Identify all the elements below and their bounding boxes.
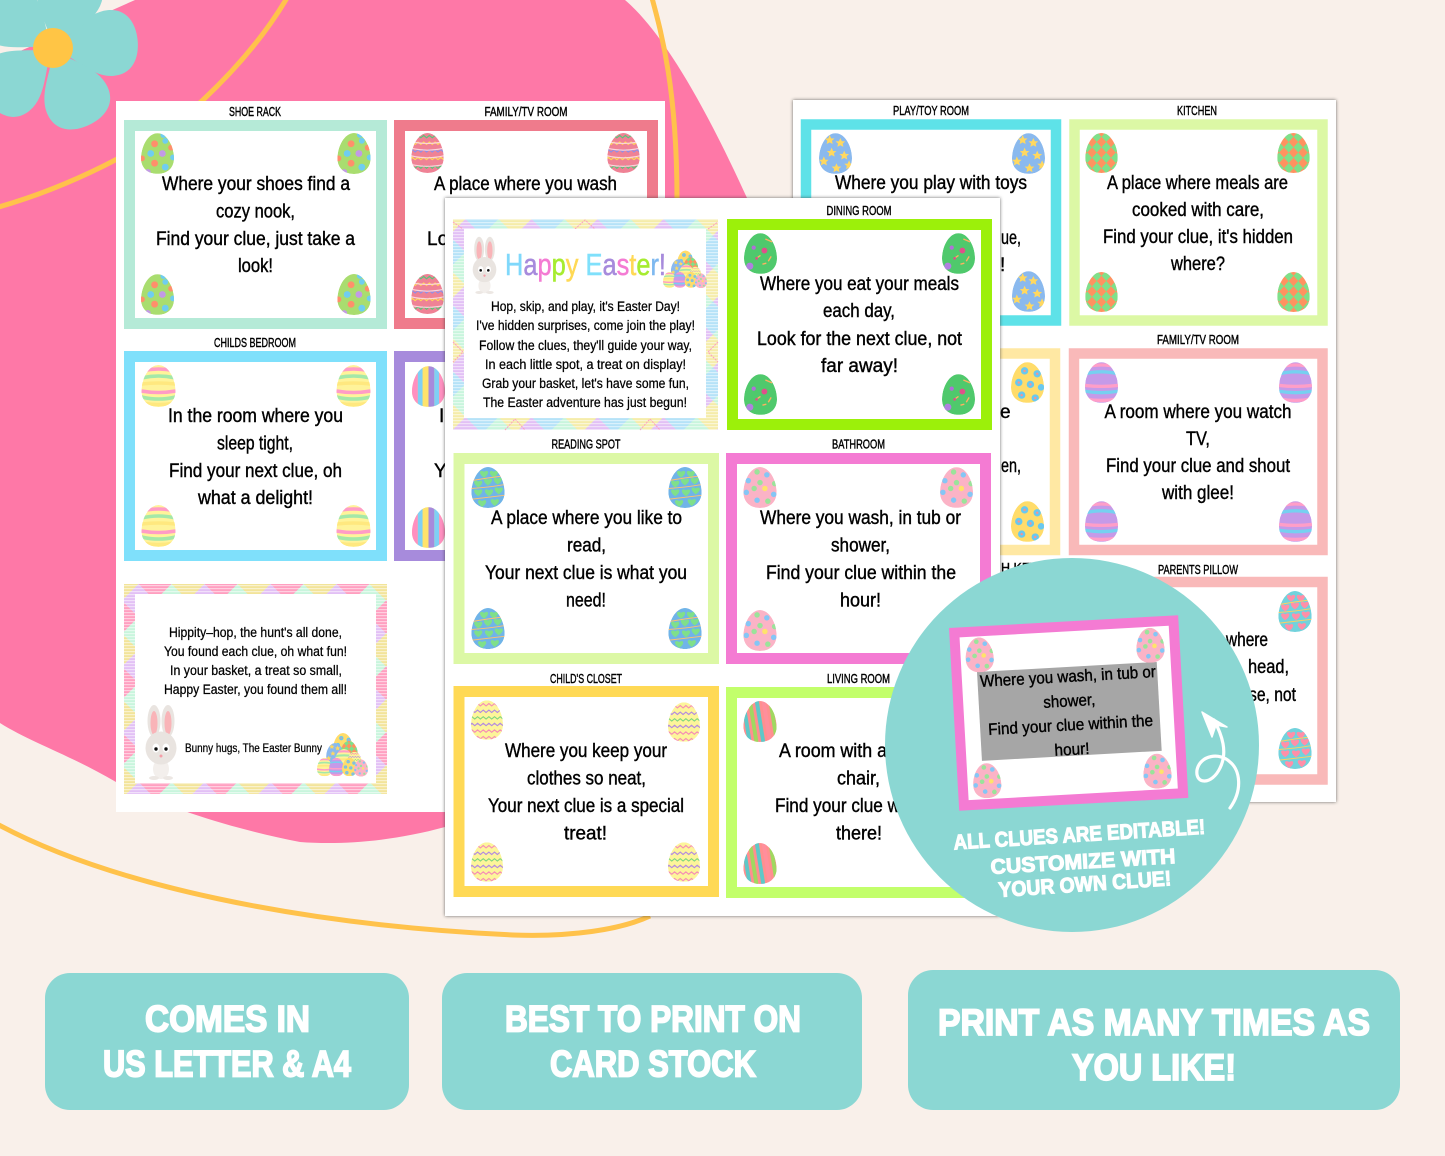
card: reading spot: Your next clue is what you <box>485 563 687 584</box>
card: reading spot: READING SPOT <box>552 438 621 452</box>
text: all clues are editable: ALL CLUES ARE EDITABLE! <box>953 816 1206 854</box>
card: closing poem: Hippity–hop, the hunt's all done, <box>169 625 342 640</box>
card: reading spot: need! <box>566 590 606 612</box>
card: bathroom: BATHROOM <box>832 438 885 452</box>
card: family/TV room 2 <box>1074 333 1322 550</box>
card: living room: A room with a <box>779 741 887 762</box>
text: all clues are editable <box>953 816 1206 902</box>
yellow curve: upper left <box>0 0 287 208</box>
yellow curve: top <box>652 0 677 200</box>
card: child's closet: Where you keep your <box>505 741 668 762</box>
button: best to print on card stock: BEST TO PRINT ON <box>505 998 801 1040</box>
card: Happy Easter intro: Grab your basket, let's have some fun, <box>482 376 689 391</box>
card: living room: there! <box>836 824 882 844</box>
card: family/TV room 2: Find your clue and shout <box>1106 456 1291 477</box>
card: Happy Easter intro: I've hidden surprises, come join the play! <box>476 318 695 333</box>
card: childs bedroom: Find your next clue, oh <box>169 461 342 482</box>
card: shoe rack: cozy nook, <box>216 202 295 222</box>
card: dining room <box>732 204 986 424</box>
card: Happy Easter intro <box>453 219 718 430</box>
card: kitchen: A place where meals are <box>1107 173 1288 194</box>
card: play/toy room: PLAY/TOY ROOM <box>893 104 969 118</box>
card: bathroom <box>732 438 986 658</box>
card: tilted editable example: Where you wash, in tub or <box>980 663 1157 691</box>
card: Happy Easter intro: In each little spot, a treat on display! <box>485 357 686 372</box>
card: purple partial card <box>400 356 652 556</box>
text: all clues are editable: YOUR OWN CLUE! <box>998 867 1172 902</box>
card: childs bedroom <box>130 336 382 556</box>
card: child's closet: Your next clue is a special <box>488 796 684 817</box>
card: living room: LIVING ROOM <box>827 672 890 686</box>
button: best to print on card stock <box>442 973 862 1110</box>
card: purple partial card: Y <box>434 461 447 482</box>
card: play/toy room <box>806 104 1056 320</box>
button: print as many times as you like: YOU LIKE! <box>1072 1047 1236 1088</box>
card: family/TV room 2: FAMILY/TV ROOM <box>1157 333 1239 347</box>
card: play/toy room: Where you play with toys <box>835 173 1027 194</box>
card: dining room: each day, <box>823 301 895 322</box>
card: family/TV room: FAMILY/TV ROOM <box>484 105 568 119</box>
button: comes in US letter and A4 <box>45 973 409 1110</box>
card: family/TV room 2: TV, <box>1186 429 1210 450</box>
card: dining room: Where you eat your meals <box>760 274 959 295</box>
card: bathroom: Where you wash, in tub or <box>760 508 962 529</box>
panel: right clue sheet <box>793 100 1336 802</box>
arrow: curly white arrow <box>1197 712 1239 808</box>
card: play/toy room: ! <box>1000 255 1005 276</box>
card: reading spot: A place where you like to <box>491 508 682 529</box>
icon: bunny <box>146 705 176 780</box>
card: tilted editable example: hour! <box>1054 740 1090 760</box>
card: kitchen: where? <box>1170 254 1225 275</box>
card: dining room: Look for the next clue, not <box>757 329 963 350</box>
heading: Happy Easter: Happy Easter! <box>505 247 666 282</box>
card: kitchen: cooked with care, <box>1132 200 1264 221</box>
card: family/TV room 2: with glee! <box>1161 483 1234 504</box>
button: best to print on card stock: CARD STOCK <box>550 1044 756 1084</box>
yellow curve: bottom <box>0 824 650 935</box>
callout: editable clues circle <box>885 558 1259 932</box>
card: closing poem <box>124 584 387 794</box>
card: shoe rack: Find your clue, just take a <box>156 229 355 250</box>
card: tilted editable example <box>954 620 1183 805</box>
card: reading spot: read, <box>567 536 606 556</box>
card: living room: Find your clue w <box>775 796 900 817</box>
pink background shape <box>0 0 781 843</box>
icon: bunny <box>473 237 496 294</box>
card: parents pillow: se, not <box>1249 685 1297 706</box>
card: parents pillow <box>1074 563 1322 780</box>
card: shoe rack: look! <box>238 256 273 277</box>
card: tilted editable example: shower, <box>1043 691 1096 712</box>
button: comes in US letter and A4: COMES IN <box>145 998 310 1040</box>
card: shoe rack <box>130 105 382 324</box>
card: living room: chair, <box>837 768 880 790</box>
card: family/TV room <box>400 105 652 324</box>
card: child's closet: CHILD'S CLOSET <box>550 672 622 686</box>
card: yellow partial card: H KEY <box>1001 561 1039 575</box>
button: print as many times as you like <box>908 970 1400 1110</box>
card: childs bedroom: CHILDS BEDROOM <box>214 336 296 350</box>
card: Happy Easter intro: Hop, skip, and play, it's Easter Day! <box>491 299 680 314</box>
card: bathroom: Find your clue within the <box>766 563 956 584</box>
card: family/TV room 2: A room where you watch <box>1104 402 1292 423</box>
card: kitchen <box>1074 104 1322 320</box>
icon: egg pile <box>317 733 368 777</box>
card: dining room: far away! <box>821 356 898 377</box>
card: parents pillow: head, <box>1248 657 1289 678</box>
card: closing poem: You found each clue, oh what fun! <box>164 644 347 659</box>
card: childs bedroom: In the room where you <box>168 406 343 427</box>
card: kitchen: KITCHEN <box>1177 104 1217 118</box>
card: dining room: DINING ROOM <box>826 204 892 218</box>
card: bathroom: shower, <box>831 536 890 556</box>
card: reading spot <box>459 438 714 658</box>
card: tilted editable example: Find your clue within the <box>988 712 1153 739</box>
card: shoe rack: Where your shoes find a <box>162 174 350 195</box>
card: living room <box>732 672 986 892</box>
card: parents pillow: PARENTS PILLOW <box>1158 563 1238 577</box>
card: child's closet: clothes so neat, <box>527 768 646 790</box>
card: yellow partial card <box>806 354 1055 575</box>
card: parents pillow: where <box>1225 630 1268 651</box>
card: kitchen: Find your clue, it's hidden <box>1103 227 1293 248</box>
card: Happy Easter intro: Follow the clues, they'll guide your way, <box>479 338 692 353</box>
card: Happy Easter intro: The Easter adventure has just begun! <box>483 395 687 410</box>
icon: flower <box>0 0 141 139</box>
card: closing poem: In your basket, a treat so small, <box>170 663 342 678</box>
card: yellow partial card: en, <box>1001 456 1021 477</box>
card: closing poem: Bunny hugs, The Easter Bunny <box>185 743 322 755</box>
icon: egg pile <box>663 251 707 288</box>
button: print as many times as you like: PRINT AS MANY TIMES AS <box>938 1002 1370 1043</box>
panel: center clue sheet <box>445 198 1000 916</box>
card: family/TV room: A place where you wash <box>434 174 617 195</box>
text: all clues are editable: CUSTOMIZE WITH <box>990 845 1176 879</box>
card: yellow partial card: e <box>1000 402 1011 423</box>
panel: left clue sheet <box>116 101 665 812</box>
card: childs bedroom: sleep tight, <box>217 434 293 454</box>
card: closing poem: Happy Easter, you found them all! <box>164 682 347 697</box>
card: childs bedroom: what a delight! <box>197 488 313 509</box>
card: child's closet: treat! <box>564 824 607 844</box>
card: child's closet <box>459 672 714 892</box>
card: family/TV room: Look for <box>427 229 496 250</box>
card: purple partial card: I <box>439 406 444 427</box>
card: play/toy room: ue, <box>1001 228 1021 249</box>
card: shoe rack: SHOE RACK <box>229 105 281 119</box>
card: bathroom: hour! <box>840 590 881 612</box>
button: comes in US letter and A4: US LETTER & A4 <box>103 1044 351 1084</box>
